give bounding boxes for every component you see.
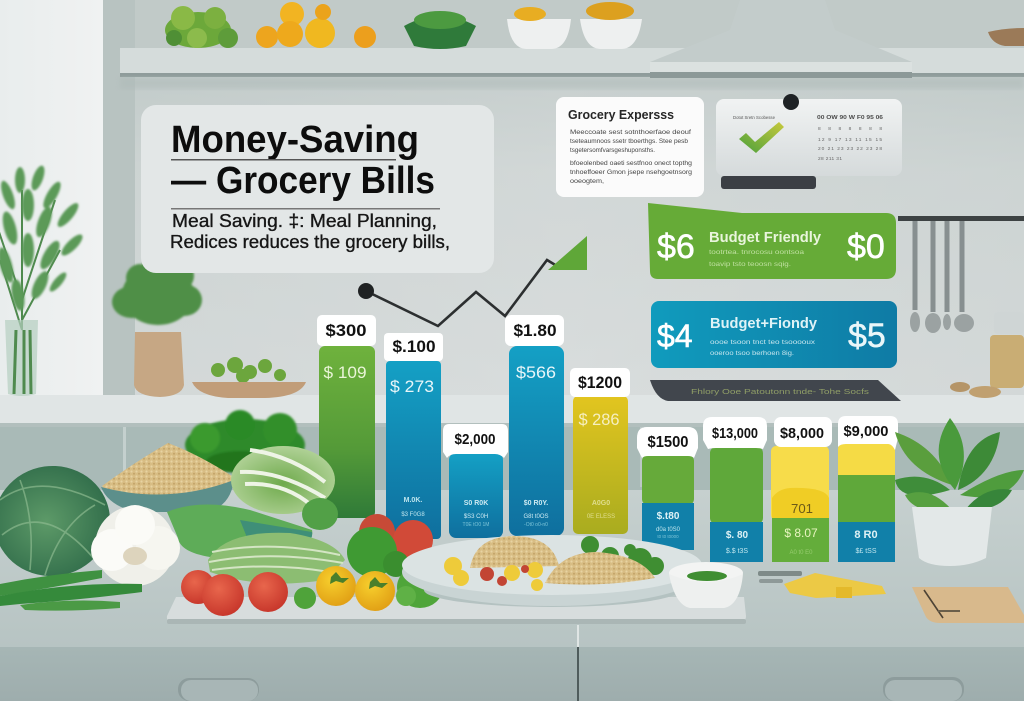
icon: knife and butter bbox=[758, 571, 886, 598]
panel: calendar with checkmark: 28 211 31 bbox=[818, 156, 842, 162]
panel: grocery express note: tseteaumnoos ssetr tboerthgs. Stee pesb bbox=[570, 138, 689, 145]
bar 5 bbox=[570, 368, 630, 534]
bar 9: 8 R0 bbox=[854, 529, 878, 541]
panel: budget friendly blue bbox=[651, 301, 897, 368]
bar 4 bbox=[505, 315, 564, 536]
panel: budget friendly blue: ooeroo tsoo berhoen 8ig. bbox=[710, 351, 794, 357]
value: $4: $4 bbox=[657, 318, 693, 354]
bar 2 bbox=[384, 333, 443, 539]
icon: leafy cucumber greens bbox=[167, 498, 338, 557]
bar 1: $300 bbox=[326, 321, 366, 340]
subtitle: Meal Saving. ‡: Meal Planning, bbox=[172, 211, 437, 231]
panel: budget friendly blue: oooe tsoon tnct teo tsooooux bbox=[710, 340, 815, 346]
panel: budget friendly green: tootrtea. tnrocosu oontsoa bbox=[709, 250, 805, 256]
icon: bowl of grains bbox=[101, 443, 235, 512]
bar 3: T0E tO0 1M bbox=[463, 522, 489, 528]
panel: grocery express note: bfoeolenbed oaeti sestfnoo onect topthg bbox=[570, 160, 693, 167]
bar 5: A0G0 bbox=[592, 500, 610, 507]
icon: wooden board bbox=[912, 587, 1024, 623]
heading: Budget Friendly: Budget Friendly bbox=[709, 229, 822, 246]
panel: grocery express note: Meeccoate sest sotnthoerfaoe deouf bbox=[570, 129, 691, 136]
panel: title: Redices reduces the grocery bills, bbox=[170, 232, 450, 252]
bar 9: $£ tSS bbox=[855, 548, 877, 555]
icon: broccoli greens bbox=[185, 410, 305, 473]
bar 4: $1.80 bbox=[514, 321, 556, 340]
bar 5: 0E ELESS bbox=[587, 514, 615, 520]
panel: calendar with checkmark: 00 OW 90 W F0 95 06 bbox=[817, 115, 883, 121]
icon: small bowl bbox=[669, 562, 743, 608]
icon: tomatoes and vegetables bbox=[181, 514, 443, 616]
icon: bowl of peas bbox=[192, 357, 306, 398]
icon: checkmark bbox=[739, 122, 784, 153]
panel: calendar with checkmark bbox=[716, 94, 902, 189]
panel: calendar with checkmark: 20 21 23 23 22 23 28 bbox=[818, 146, 882, 152]
bar 5: $ 286 bbox=[578, 410, 620, 429]
panel: calendar with checkmark: 8 8 8 8 8 8 8 bbox=[818, 126, 882, 132]
panel: title bbox=[141, 105, 494, 273]
bar 5: $1200 bbox=[578, 373, 622, 392]
bar chart bbox=[317, 315, 898, 562]
panel: cutting board bbox=[167, 597, 746, 624]
icon: garlic bbox=[91, 505, 180, 586]
bar 6: $1500 bbox=[648, 434, 689, 451]
icon: napa cabbage bbox=[231, 446, 335, 514]
icon: plate of rice and vegetables bbox=[402, 535, 702, 607]
icon: potted plant bbox=[112, 244, 202, 397]
drawer handles bbox=[178, 677, 964, 701]
bar 2: $3 F0G8 bbox=[401, 512, 425, 518]
panel: budget friendly green: toavip tsto teoosn sqig. bbox=[709, 262, 791, 268]
banner: dark footer note bbox=[650, 380, 901, 401]
value: $5: $5 bbox=[848, 317, 886, 355]
bar 1 bbox=[317, 315, 376, 518]
panel: calendar with checkmark: 12 9 17 13 11 15 15 bbox=[818, 137, 882, 143]
icon: folded greens bbox=[208, 533, 345, 584]
heading: Grocery Express: Grocery Expersss bbox=[568, 108, 674, 122]
bar 9: $9,000 bbox=[844, 423, 888, 440]
bar 8: $8,000 bbox=[780, 425, 824, 442]
bar 7: $.$ t3S bbox=[726, 548, 748, 555]
icon: cabbage bbox=[0, 458, 117, 584]
icon: green beans bbox=[0, 570, 142, 611]
line chart arrow bbox=[358, 236, 587, 326]
panel: grocery express note: tnhoeffoeer Gmon jsepe nsehgoetnsorg bbox=[570, 169, 693, 176]
bar 8: $ 8.07 bbox=[784, 526, 818, 540]
bar 1: $ 109 bbox=[324, 363, 366, 382]
bar 3: $S3 C0H bbox=[464, 514, 488, 520]
panel: grocery express note: tsgetersomfvarsgeshuponsths. bbox=[570, 147, 655, 154]
bar 4: $566 bbox=[516, 363, 556, 382]
bar 8: 701 bbox=[791, 501, 813, 516]
bar 3: $2,000 bbox=[454, 431, 496, 448]
panel: grocery express note: ooeogtem, bbox=[570, 178, 604, 185]
banner: dark footer note: Fhlory Ooe Patoutonn tnde- Tohe Socfs bbox=[691, 387, 869, 396]
panel: grocery express note bbox=[556, 97, 704, 197]
bar 2: M.0K. bbox=[404, 497, 422, 504]
bar 3 bbox=[443, 424, 508, 538]
bar 7: $. 80 bbox=[726, 530, 749, 541]
bar 8 bbox=[771, 417, 832, 562]
panel: calendar with checkmark: Dotot Sretn Scobesse bbox=[733, 115, 775, 120]
bar 4: -Ot0 o0-n0 bbox=[524, 522, 548, 528]
panel: budget friendly green bbox=[648, 203, 896, 279]
bar 2: $ 273 bbox=[390, 377, 434, 396]
icon: hanging kitchen utensils bbox=[898, 216, 1024, 333]
heading: Budget-Friendly: Budget+Fiondy bbox=[710, 315, 818, 332]
bar 9 bbox=[838, 416, 898, 562]
bar 4: G8t t0OS bbox=[523, 514, 549, 520]
bar 7: $13,000 bbox=[712, 425, 758, 442]
icon: potted spinach plant bbox=[895, 418, 1024, 566]
bar 6: d0a t0S0 bbox=[656, 527, 681, 533]
heading: Money-Saving: Money-Saving bbox=[171, 119, 419, 161]
bar 6: t0 t0 t0000 bbox=[657, 534, 679, 539]
bar 6: $.t80 bbox=[657, 511, 680, 522]
bar 7 bbox=[703, 417, 767, 562]
bar 8: A0 t0 E0 bbox=[789, 550, 813, 556]
value: $6: $6 bbox=[657, 228, 695, 266]
bar 3: S0 R0K bbox=[464, 500, 488, 507]
icon: shelf with produce and bowls bbox=[120, 2, 1024, 89]
bar 6 bbox=[637, 427, 698, 550]
icon: jar and spoons on counter bbox=[950, 312, 1024, 398]
icon: range hood bbox=[650, 0, 912, 78]
value: $0: $0 bbox=[847, 228, 885, 266]
bar 2: $.100 bbox=[392, 337, 436, 356]
bar 4: $0 R0Y. bbox=[524, 500, 548, 507]
heading: Grocery Bills: — Grocery Bills bbox=[171, 160, 435, 202]
icon: tall herb plant in vase bbox=[0, 164, 85, 396]
